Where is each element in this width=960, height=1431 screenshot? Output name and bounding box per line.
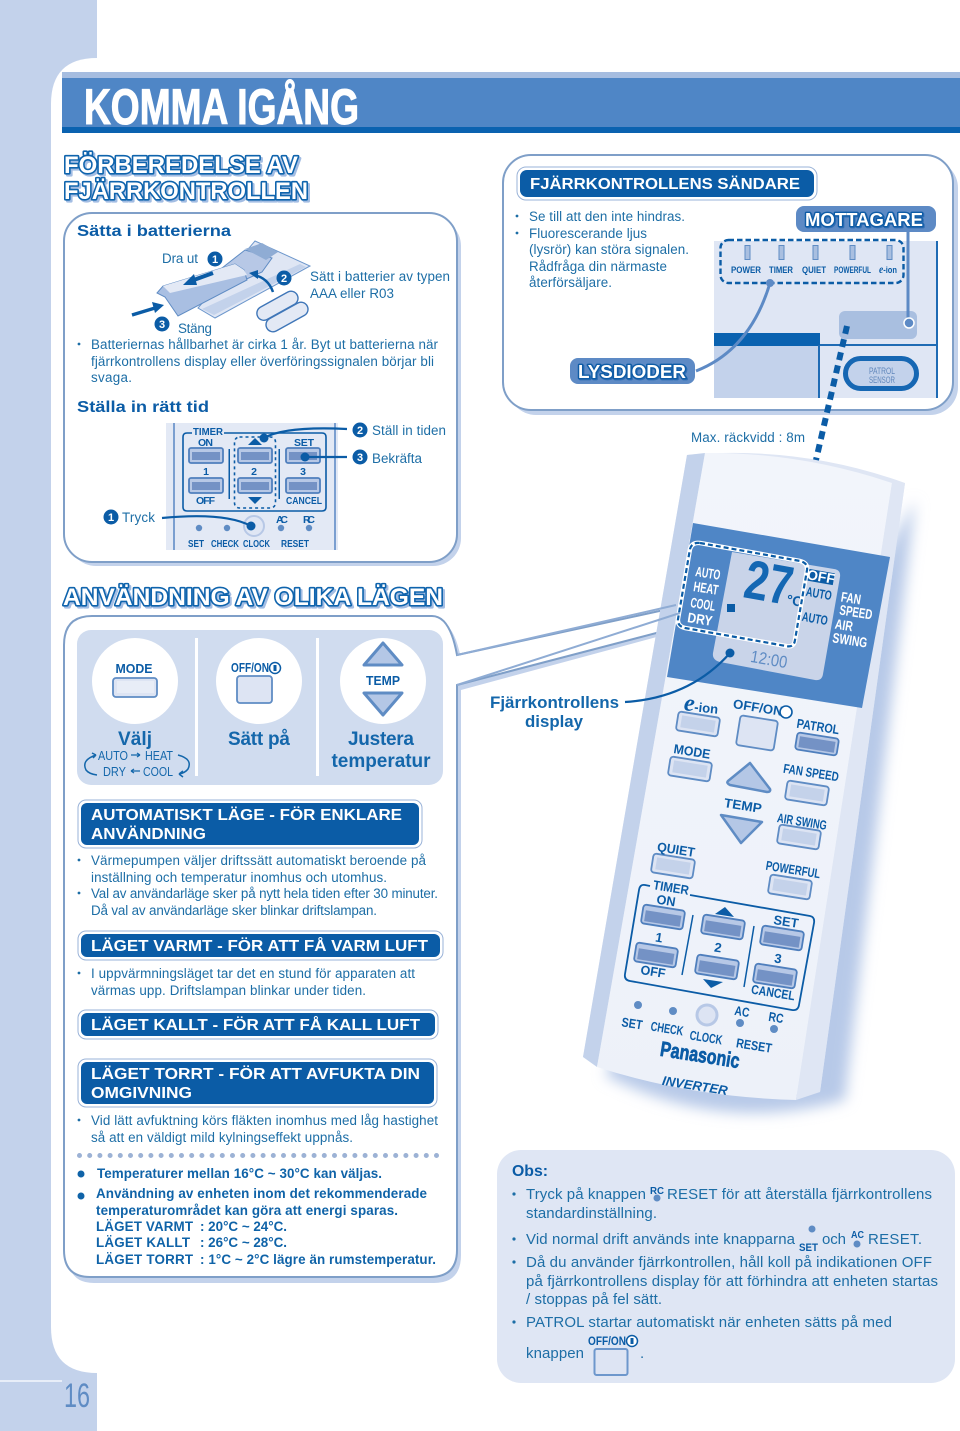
step labels: batteries: 3	[159, 319, 165, 331]
label: leds	[570, 279, 774, 384]
remote button labels: CLOCK	[689, 1028, 724, 1048]
title banner	[62, 72, 960, 135]
bar: auto mode: ANVÄNDNING	[91, 826, 206, 843]
illustration: timer buttons: OFF	[196, 495, 216, 507]
note: reset	[512, 1186, 932, 1222]
text: temperature recommendations: : 26°C ~ 28°C.	[200, 1235, 287, 1250]
lcd	[713, 548, 840, 680]
note: set and ac: Vid normal drift används inte knapparna	[526, 1231, 796, 1248]
remote button labels: SET	[621, 1014, 644, 1033]
illustration: timer buttons: ON	[198, 437, 213, 449]
note: patrol: .	[640, 1345, 644, 1362]
illustration: indoor unit: TIMER	[769, 265, 793, 276]
illustration: timer buttons: 2	[251, 466, 257, 478]
callout: display label: Fjärrkontrollens	[490, 693, 619, 712]
illustration: timer buttons: SET	[188, 538, 204, 550]
note: set and ac: och	[822, 1231, 846, 1248]
mode cycle: DRY	[103, 764, 126, 779]
remote button labels: POWERFUL	[765, 858, 821, 881]
illustration: timer buttons: AC	[276, 514, 288, 526]
heading: set the time: Ställa in rätt tid	[77, 399, 209, 416]
mode cycle: AUTO	[98, 748, 128, 763]
text: heat mode: I uppvärmningsläget tar det en stund för apparaten att	[91, 966, 415, 981]
callouts: timer steps: Bekräfta	[372, 451, 423, 466]
display mode labels: DRY	[686, 609, 714, 629]
note: set and ac: AC	[851, 1230, 864, 1241]
remote button labels: TEMP	[723, 795, 763, 816]
remote button labels: OFF	[640, 962, 667, 981]
mode cycle	[85, 748, 189, 779]
remote button labels	[621, 690, 841, 1056]
note: reset: Tryck på knappen	[526, 1186, 646, 1203]
note: off indication: Då du använder fjärrkontrollen, håll koll på indikationen OFF	[526, 1254, 932, 1271]
heading: preparing the remote: FJÄRRKONTROLLEN	[64, 178, 308, 205]
step labels: batteries: Dra ut	[162, 251, 198, 266]
note: set and ac: SET	[799, 1242, 818, 1254]
remote button labels: OFF/ON	[732, 696, 784, 719]
remote button labels: RESET	[735, 1035, 773, 1056]
illustration: indoor unit: POWERFUL	[834, 265, 871, 276]
lcd: AUTO	[805, 584, 833, 603]
display mode labels: FAN	[840, 589, 862, 607]
mode cycle: COOL	[143, 764, 173, 779]
signal range dashes	[816, 326, 847, 460]
text: auto mode: inställning och temperatur inomhus och utomhus.	[91, 870, 387, 885]
button: off on: OFF/ON	[231, 661, 269, 675]
note: off indication: / stoppas på fel sätt.	[526, 1291, 662, 1308]
remote button labels: MODE	[673, 741, 712, 762]
text: dry mode: så att en väldigt mild kylningseffekt uppnås.	[91, 1130, 353, 1145]
text: transmitter notes	[516, 209, 689, 290]
text: temperature recommendations: : 1°C ~ 2°C lägre än rumstemperatur.	[200, 1252, 436, 1267]
note: patrol: OFF/ON	[588, 1334, 626, 1348]
text: transmitter notes: Rådfråga din närmaste	[529, 259, 667, 274]
text: auto mode: Då val av användarläge sker blinkar driftslampan.	[91, 903, 377, 918]
text: temperature recommendations: : 20°C ~ 24°C.	[200, 1219, 287, 1234]
remote button labels: ON	[656, 892, 677, 909]
step labels: batteries: Sätt i batterier av typen	[310, 269, 450, 284]
illustration: battery cover	[132, 241, 311, 334]
bar: dry mode: LÄGET TORRT - FÖR ATT AVFUKTA DIN	[91, 1066, 420, 1083]
callouts: timer steps	[104, 422, 446, 530]
illustration: indoor unit	[714, 240, 938, 398]
remote button labels: SET	[773, 912, 800, 931]
illustration: indoor unit: PATROL	[869, 366, 895, 377]
display mode labels	[686, 563, 874, 651]
bar: heat mode: LÄGET VARMT - FÖR ATT FÅ VARM LUFT	[91, 938, 429, 955]
bar: heat mode	[78, 931, 443, 960]
remote button labels: 3	[773, 951, 783, 966]
text: range: Max. räckvidd : 8m	[691, 430, 805, 445]
text: transmitter notes: Fluorescerande ljus	[529, 226, 647, 241]
step labels: batteries: Stäng	[178, 321, 212, 336]
step labels: batteries: AAA eller R03	[310, 286, 394, 301]
illustration: timer buttons: RC	[303, 514, 315, 526]
illustration: timer buttons: CHECK	[211, 538, 239, 550]
text: temperature recommendations	[78, 1166, 436, 1267]
mode captions: Välj	[118, 729, 152, 750]
bar: dry mode	[78, 1059, 437, 1107]
remote button labels: e-ion	[683, 690, 720, 720]
illustration: indoor unit: e-ion	[879, 262, 897, 276]
bar: transmitter heading	[517, 167, 817, 200]
title banner: KOMMA IGÅNG	[84, 79, 359, 135]
remote button labels: CHECK	[650, 1019, 685, 1039]
illustration: timer buttons	[166, 423, 338, 550]
callout lines to display	[457, 605, 680, 685]
label: leds: LYSDIODER	[578, 362, 686, 382]
display mode labels: HEAT	[692, 578, 720, 598]
remote buttons	[625, 711, 839, 1033]
brand	[659, 1038, 741, 1098]
mode captions	[118, 729, 431, 772]
text: temperature recommendations: LÄGET TORRT	[96, 1252, 194, 1267]
button: off on	[231, 661, 280, 703]
bar: dry mode: OMGIVNING	[91, 1085, 192, 1102]
text: temperature recommendations: Temperaturer mellan 16°C ~ 30°C kan väljas.	[97, 1166, 382, 1181]
illustration: timer buttons: SET	[294, 437, 315, 449]
text: battery note: svaga.	[91, 370, 132, 385]
remote button labels: 1	[654, 930, 664, 945]
mode captions: Justera	[348, 729, 414, 750]
button: temperature: TEMP	[366, 673, 400, 688]
text: heat mode: värmas upp. Driftslampan blinkar under tiden.	[91, 983, 366, 998]
lcd: °C	[785, 591, 804, 610]
brand: Panasonic	[659, 1038, 741, 1073]
mode captions: temperatur	[332, 751, 431, 772]
text: auto mode: Värmepumpen väljer driftssätt automatiskt beroende på	[91, 853, 427, 868]
illustration: timer buttons: 1	[203, 466, 209, 478]
note: set and ac: RESET.	[868, 1231, 922, 1248]
button: temperature	[364, 643, 402, 715]
step labels: batteries: 2	[281, 273, 287, 285]
panel: mode buttons	[77, 630, 443, 785]
heading: preparing the remote	[64, 152, 308, 205]
text: heat mode	[78, 966, 415, 998]
button: mode: MODE	[116, 661, 153, 676]
bar: auto mode: AUTOMATISKT LÄGE - FÖR ENKLARE	[91, 807, 402, 824]
text: transmitter notes: återförsäljare.	[529, 275, 612, 290]
panel: modes outline	[64, 610, 664, 1283]
lcd: 12:00	[749, 647, 789, 672]
note: reset: standardinställning.	[526, 1205, 657, 1222]
text: temperature recommendations: temperaturområdet kan göra att energi sparas.	[96, 1203, 398, 1218]
text: dry mode	[78, 1113, 438, 1145]
page number: 16	[64, 1377, 90, 1415]
display mode labels: AIR	[834, 616, 854, 634]
step labels: batteries	[154, 251, 450, 336]
note: off indication: på fjärrkontrollens display för att förhindra att enheten startas	[526, 1273, 938, 1290]
label: receiver	[796, 206, 936, 328]
text: battery note: Batteriernas hållbarhet är cirka 1 år. Byt ut batterierna när	[91, 337, 439, 352]
note: patrol: PATROL startar automatiskt när enheten sätts på med	[526, 1314, 892, 1331]
bar: auto mode	[78, 800, 422, 848]
text: battery note: fjärrkontrollens display eller överföringssignalen börjar bli	[91, 354, 434, 369]
remote button labels: FAN SPEED	[782, 761, 840, 784]
note: set and ac	[512, 1226, 922, 1254]
remote button labels: PATROL	[796, 716, 841, 737]
illustration: timer buttons: 3	[300, 466, 306, 478]
remote button labels: QUIET	[656, 839, 696, 860]
display mode labels: COOL	[689, 594, 717, 614]
callout: display label	[490, 653, 730, 731]
brand: INVERTER	[661, 1073, 729, 1098]
remote button labels: TIMER	[652, 877, 691, 898]
lcd: AUTO	[801, 609, 829, 628]
remote button labels: AIR SWING	[776, 810, 828, 833]
bar: transmitter heading: FJÄRRKONTROLLENS SÄNDARE	[530, 176, 800, 193]
display band	[667, 523, 890, 708]
heading: preparing the remote: FÖRBEREDELSE AV	[64, 152, 298, 179]
text: temperature recommendations: LÄGET VARMT	[96, 1219, 194, 1234]
bar: cool mode	[78, 1010, 438, 1039]
illustration: timer buttons: RESET	[281, 538, 309, 550]
remote button labels: AC	[733, 1003, 751, 1020]
remote control	[583, 453, 915, 1113]
step labels: batteries: 1	[212, 254, 218, 266]
lcd: OFF	[806, 566, 837, 587]
lcd: 27	[740, 548, 798, 617]
label: receiver: MOTTAGARE	[805, 210, 923, 230]
display mode labels: AUTO	[694, 563, 722, 583]
dashed display highlight	[678, 543, 807, 646]
note: patrol: knappen	[526, 1345, 584, 1362]
note: reset: RESET för att återställa fjärrkontrollens	[667, 1186, 932, 1203]
illustration: indoor unit: SENSOR	[869, 375, 895, 386]
note: reset: RC	[650, 1186, 664, 1197]
illustration: indoor unit: POWER	[731, 265, 761, 276]
text: temperature recommendations: LÄGET KALLT	[96, 1235, 191, 1250]
button: mode	[113, 661, 157, 697]
remote button labels: CANCEL	[750, 982, 796, 1003]
bar: cool mode: LÄGET KALLT - FÖR ATT FÅ KALL LUFT	[91, 1017, 421, 1034]
display mode labels: SPEED	[838, 602, 874, 622]
mode captions: Sätt på	[228, 729, 290, 750]
remote button labels: 2	[713, 940, 723, 955]
illustration: timer buttons: CLOCK	[243, 538, 270, 550]
text: auto mode	[78, 853, 438, 918]
note: off indication	[512, 1254, 938, 1308]
text: dry mode: Vid lätt avfuktning körs fläkten inomhus med låg hastighet	[91, 1113, 438, 1128]
display mode labels: SWING	[831, 629, 869, 651]
callouts: timer steps: 1	[108, 512, 114, 524]
remote body	[583, 453, 905, 1100]
note: patrol	[512, 1314, 892, 1375]
illustration: timer buttons: TIMER	[193, 426, 223, 438]
mode cycle: HEAT	[145, 748, 173, 763]
text: transmitter notes: (lysrör) kan störa signalen.	[529, 242, 689, 257]
callout: display label: display	[525, 712, 584, 731]
text: transmitter notes: Se till att den inte hindras.	[529, 209, 685, 224]
panel: batteries and clock	[64, 213, 461, 566]
text: temperature recommendations: Användning av enheten inom det rekommenderade	[96, 1186, 427, 1201]
heading: using modes: ANVÄNDNING AV OLIKA LÄGEN	[63, 584, 443, 611]
remote shadow	[605, 500, 915, 1113]
callouts: timer steps: 3	[357, 452, 363, 464]
heading: insert batteries: Sätta i batterierna	[77, 223, 231, 240]
illustration: timer buttons: CANCEL	[286, 495, 322, 507]
panel: transmitter	[503, 155, 958, 415]
callouts: timer steps: Ställ in tiden	[372, 423, 446, 438]
callouts: timer steps: Tryck	[122, 510, 155, 525]
illustration: indoor unit: QUIET	[802, 265, 826, 276]
heading: notes: Obs:	[512, 1163, 548, 1180]
remote button labels: RC	[767, 1009, 785, 1026]
panel: notes	[497, 1150, 955, 1383]
callouts: timer steps: 2	[357, 425, 363, 437]
text: auto mode: Val av användarläge sker på nytt hela tiden efter 30 minuter.	[91, 886, 438, 901]
text: battery note	[78, 337, 439, 385]
